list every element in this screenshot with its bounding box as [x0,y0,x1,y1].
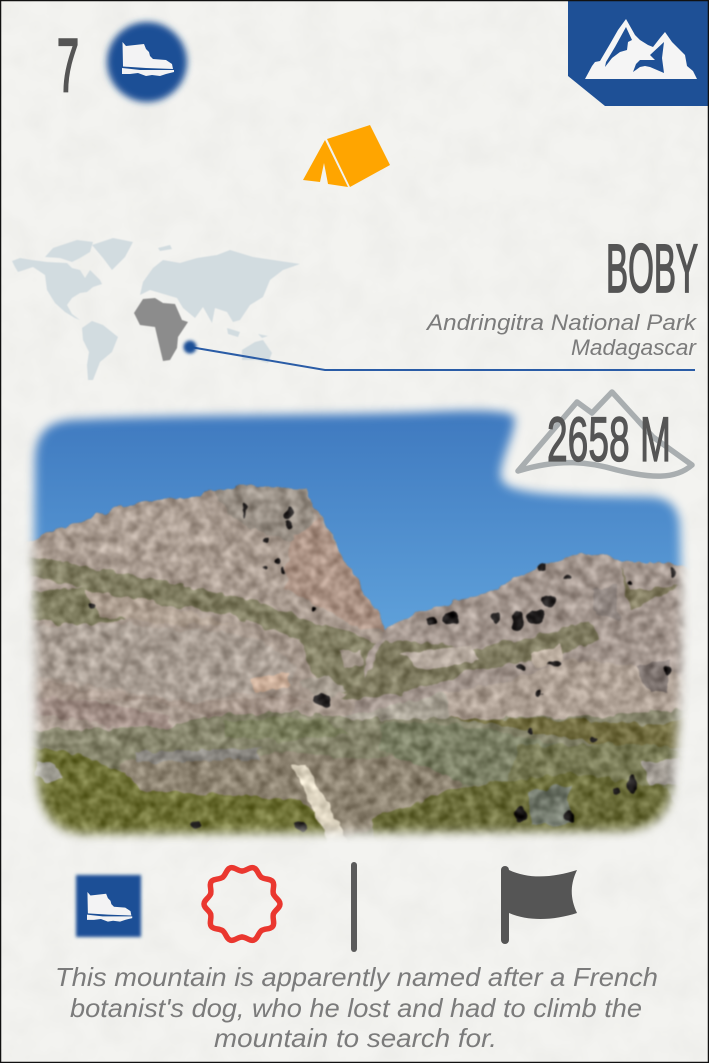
logo: mountain badge [568,0,709,106]
description text [55,962,658,1053]
icon: boot in blue circle [107,22,187,102]
description text: botanist's dog, who he lost and had to climb the [70,993,642,1023]
step number: 7 [57,23,79,107]
dark rock holes [89,504,677,830]
icon: boot on blue square [76,875,141,937]
ground [34,708,683,840]
right mountain [342,552,688,722]
photo: Andringitra mountains [10,395,700,850]
location text: Andringitra National Park [425,310,697,335]
vertical bar icon [351,862,357,952]
elevation badge [518,392,692,476]
location marker and leader line [184,340,695,370]
icon: flag [501,866,577,944]
icon: red wavy badge [201,863,283,945]
trail [290,764,345,840]
description text: mountain to search for. [214,1023,497,1053]
description text: This mountain is apparently named after a French [55,962,658,992]
left mountain [26,484,386,733]
world map with Africa highlighted [12,238,300,380]
icon: orange tent [303,125,390,187]
location text: Madagascar [571,335,698,360]
location text [425,310,698,360]
